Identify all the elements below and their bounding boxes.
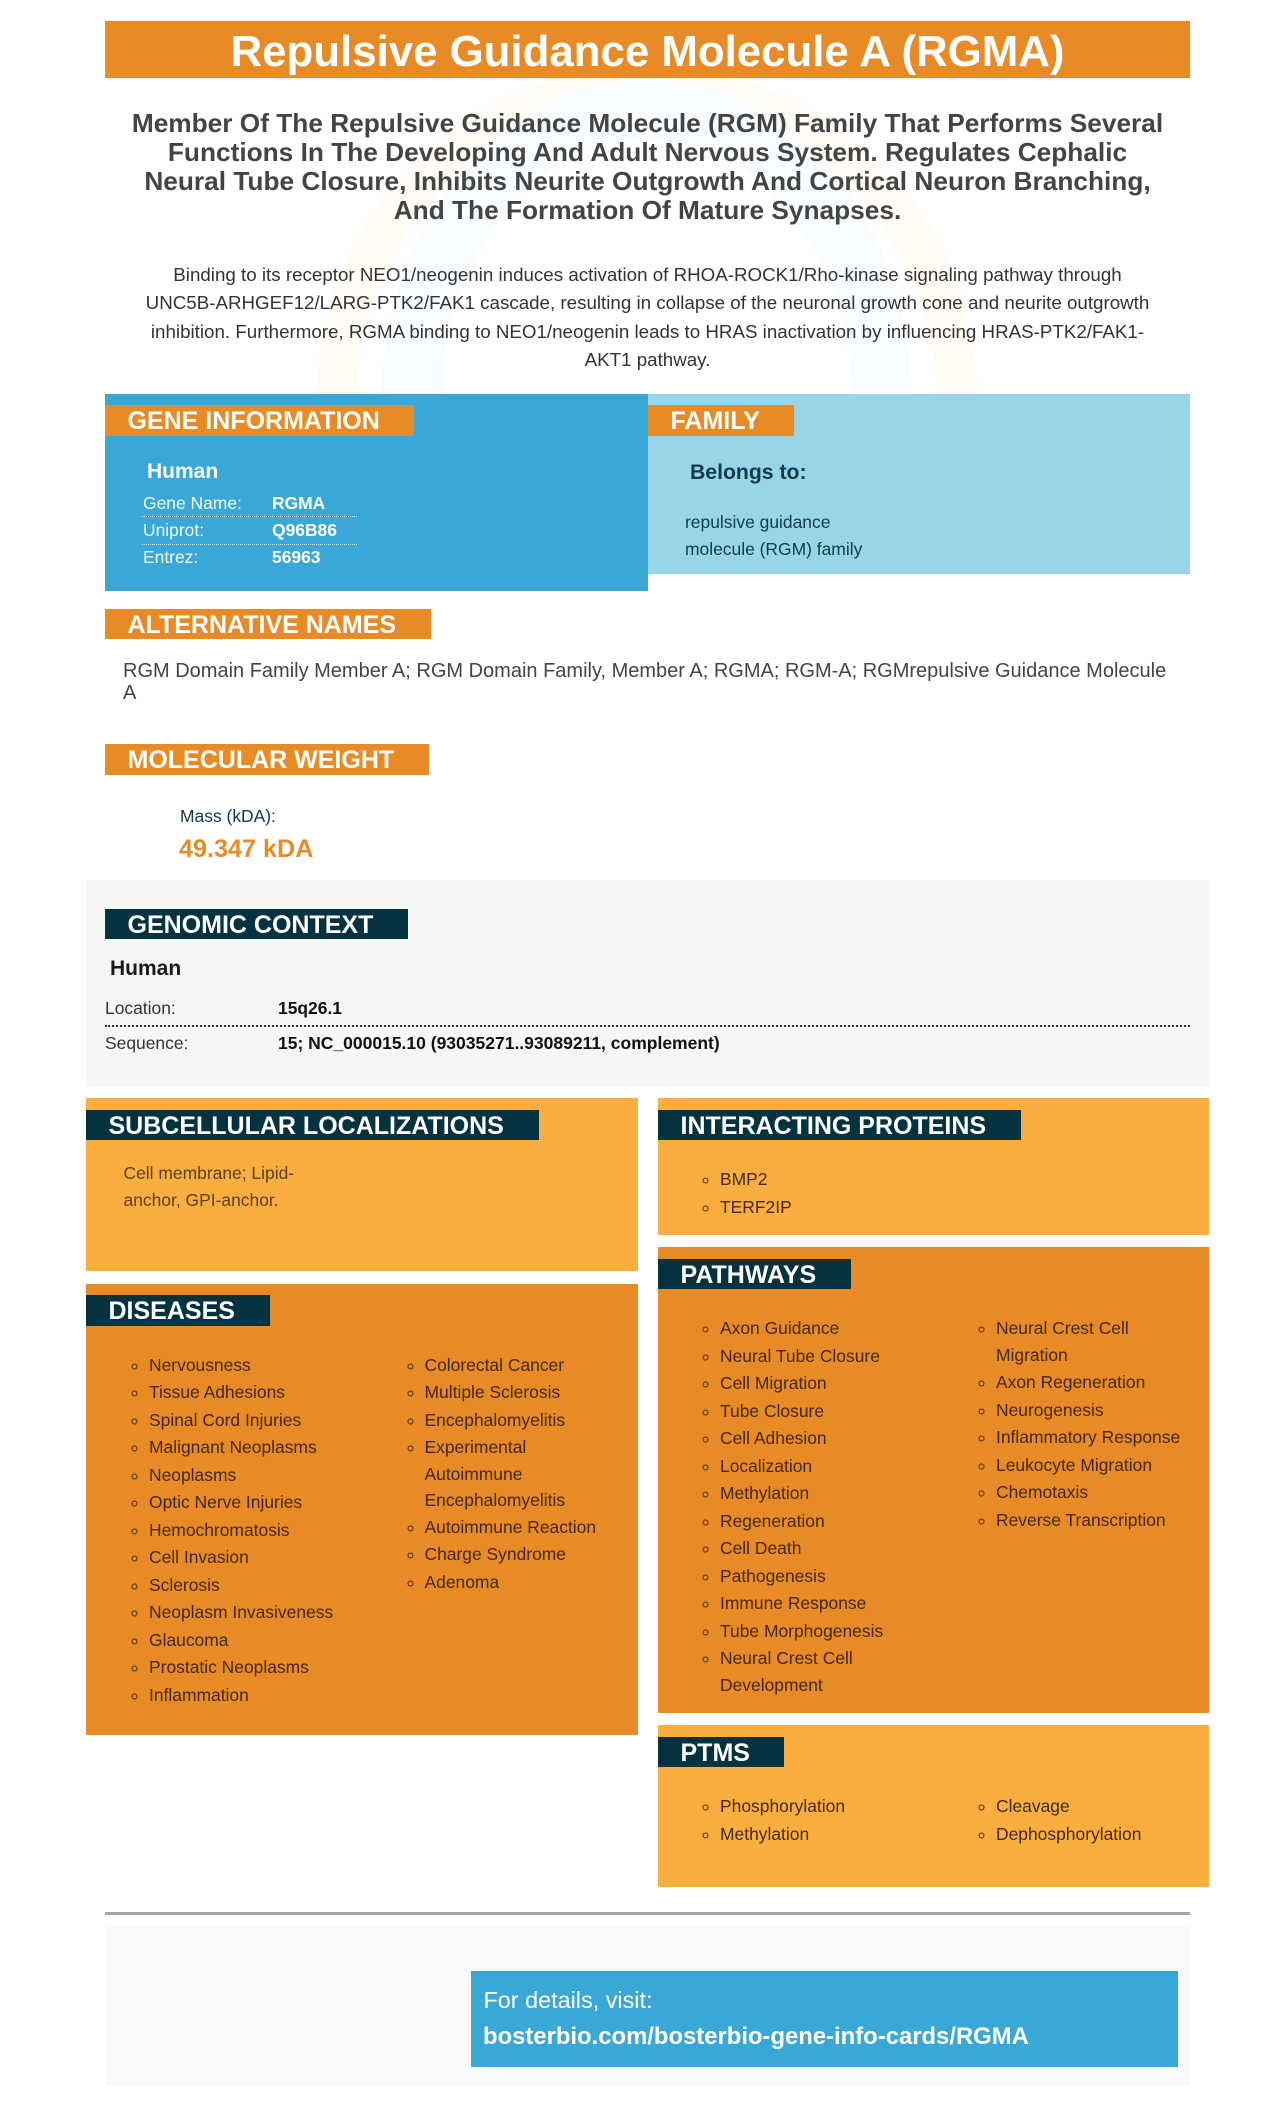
pathway list column 1: Localization <box>720 1456 812 1476</box>
background watermark logo <box>318 78 976 394</box>
protein list <box>702 1169 792 1217</box>
heading: pathways <box>658 1259 851 1289</box>
summary heading: Member Of The Repulsive Guidance Molecule (RGM) Family That Performs Several <box>132 108 1163 138</box>
disease list column 2: Autoimmune Reaction <box>424 1517 596 1537</box>
heading: genomic context: GENOMIC CONTEXT <box>128 911 373 939</box>
details url: bosterbio.com/bosterbio-gene-info-cards/RGMA <box>483 2023 1029 2050</box>
localization text: Cell membrane; Lipid- <box>124 1163 294 1183</box>
disease list column 2: Charge Syndrome <box>424 1544 566 1564</box>
details label: For details, visit: <box>484 1987 652 2013</box>
sequence row: 15; NC_000015.10 (93035271..93089211, complement) <box>278 1033 720 1053</box>
pathway list column 1: Pathogenesis <box>720 1566 826 1586</box>
ptm list column 2: Cleavage <box>996 1796 1070 1816</box>
heading: diseases <box>86 1295 270 1326</box>
panel: footer <box>105 1927 1190 2086</box>
panel: diseases <box>86 1284 638 1735</box>
description text: UNC5B-ARHGEF12/LARG-PTK2/FAK1 cascade, resulting in collapse of the neuronal growth cone and neurite outgrowth <box>146 292 1149 313</box>
ptm list column 1: Methylation <box>720 1824 809 1844</box>
disease list column 1: Neoplasm Invasiveness <box>149 1602 333 1622</box>
ptm list column 1 <box>702 1796 845 1844</box>
pathway list column 1: Cell Migration <box>720 1373 827 1393</box>
disease list column 1: Hemochromatosis <box>149 1520 290 1540</box>
pathway list column 1: Methylation <box>720 1483 809 1503</box>
panel: pathways <box>658 1247 1209 1713</box>
disease list column 1: Spinal Cord Injuries <box>149 1410 301 1430</box>
callout: details link <box>471 1971 1178 2067</box>
pathway list column 1: Cell Adhesion <box>720 1428 827 1448</box>
entrez row: 56963 <box>272 547 320 567</box>
protein list: BMP2 <box>720 1169 768 1189</box>
heading: interacting proteins: INTERACTING PROTEINS <box>680 1112 986 1140</box>
disease list column 1: Glaucoma <box>149 1630 228 1650</box>
heading: subcellular localizations: SUBCELLULAR LOCALIZATIONS <box>108 1112 504 1140</box>
disease list column 2: Experimental Autoimmune Encephalomyelitis <box>424 1437 565 1510</box>
belongs to label: Belongs to: <box>690 461 807 484</box>
disease list column 2 <box>408 1355 596 1592</box>
disease list column 2: Adenoma <box>424 1572 499 1592</box>
mass label: Mass (kDA): <box>180 806 276 826</box>
disease list column 1: Malignant Neoplasms <box>149 1437 317 1457</box>
alternative names text: A <box>123 682 136 704</box>
gene name row: Gene Name: <box>143 493 242 513</box>
heading: ptms <box>658 1737 784 1767</box>
panel: gene information <box>105 394 648 591</box>
pathway list column 1: Neural Crest Cell Development <box>720 1648 853 1695</box>
panel: genomic context <box>86 880 1209 1086</box>
pathway list column 2: Neural Crest Cell Migration <box>996 1318 1129 1365</box>
summary heading: And The Formation Of Mature Synapses. <box>394 195 901 225</box>
protein list: TERF2IP <box>720 1197 792 1217</box>
family text: molecule (RGM) family <box>685 539 862 559</box>
description text: Binding to its receptor NEO1/neogenin induces activation of RHOA-ROCK1/Rho-kinase signaling pathway through <box>173 264 1122 285</box>
pathway list column 2: Neurogenesis <box>996 1400 1104 1420</box>
species label: Human <box>147 460 218 483</box>
disease list column 2: Encephalomyelitis <box>424 1410 565 1430</box>
gene name row <box>142 490 357 517</box>
pathway list column 1 <box>702 1318 883 1695</box>
disease list column 1: Neoplasms <box>149 1465 236 1485</box>
localization text: anchor, GPI-anchor. <box>124 1190 279 1210</box>
summary heading: Functions In The Developing And Adult Nervous System. Regulates Cephalic <box>168 137 1127 167</box>
disease list column 2: Multiple Sclerosis <box>424 1382 560 1402</box>
pathway list column 2 <box>978 1318 1180 1530</box>
panel: ptms <box>658 1725 1209 1887</box>
panel: interacting proteins <box>658 1098 1209 1235</box>
summary heading <box>132 108 1163 225</box>
disease list column 1: Sclerosis <box>149 1575 220 1595</box>
alternative names text: RGM Domain Family Member A; RGM Domain Family, Member A; RGMA; RGM-A; RGMrepulsive Guidance Molecule <box>123 660 1166 682</box>
uniprot row <box>142 517 357 545</box>
disease list column 1: Prostatic Neoplasms <box>149 1657 309 1677</box>
heading: alternative names: ALTERNATIVE NAMES <box>128 611 396 639</box>
title banner: Repulsive Guidance Molecule A (RGMA) <box>231 27 1064 76</box>
pathway list column 1: Axon Guidance <box>720 1318 839 1338</box>
mass value: 49.347 kDA <box>179 835 313 863</box>
location row <box>105 995 1190 1027</box>
disease list column 1: Optic Nerve Injuries <box>149 1492 302 1512</box>
location row: Location: <box>105 998 176 1018</box>
pathway list column 1: Tube Morphogenesis <box>720 1621 883 1641</box>
pathway list column 2: Leukocyte Migration <box>996 1455 1152 1475</box>
family text: repulsive guidance <box>685 512 830 532</box>
heading: pathways: PATHWAYS <box>680 1261 816 1289</box>
pathway list column 1: Cell Death <box>720 1538 801 1558</box>
disease list column 1: Inflammation <box>149 1685 249 1705</box>
disease list column 2: Colorectal Cancer <box>424 1355 564 1375</box>
entrez row: Entrez: <box>143 547 198 567</box>
pathway list column 2: Reverse Transcription <box>996 1510 1166 1530</box>
pathway list column 2: Chemotaxis <box>996 1482 1088 1502</box>
species label: Human <box>110 957 181 980</box>
heading: molecular weight: MOLECULAR WEIGHT <box>128 746 394 774</box>
ptm list column 2 <box>978 1796 1141 1844</box>
pathway list column 1: Tube Closure <box>720 1401 824 1421</box>
heading: family: FAMILY <box>670 407 760 435</box>
disease list column 1: Nervousness <box>149 1355 251 1375</box>
pathway list column 1: Regeneration <box>720 1511 825 1531</box>
location row: 15q26.1 <box>278 998 342 1018</box>
heading: gene information: GENE INFORMATION <box>128 407 380 435</box>
pathway list column 2: Inflammatory Response <box>996 1427 1180 1447</box>
description text: AKT1 pathway. <box>585 349 710 370</box>
localization text <box>124 1163 294 1210</box>
description text <box>146 264 1149 370</box>
disease list column 1: Tissue Adhesions <box>149 1382 285 1402</box>
disease list column 1: Cell Invasion <box>149 1547 249 1567</box>
ptm list column 2: Dephosphorylation <box>996 1824 1141 1844</box>
uniprot row: Q96B86 <box>272 520 337 540</box>
alternative names text <box>123 660 1166 704</box>
panel: subcellular localizations <box>86 1098 638 1271</box>
pathway list column 1: Immune Response <box>720 1593 866 1613</box>
heading: ptms: PTMS <box>680 1739 750 1767</box>
uniprot row: Uniprot: <box>143 520 204 540</box>
pathway list column 2: Axon Regeneration <box>996 1372 1145 1392</box>
gene name row: RGMA <box>272 493 325 513</box>
title banner <box>105 21 1190 78</box>
heading: diseases: DISEASES <box>108 1297 235 1325</box>
panel: family <box>648 394 1190 574</box>
summary heading: Neural Tube Closure, Inhibits Neurite Outgrowth And Cortical Neuron Branching, <box>144 166 1151 196</box>
heading: family <box>648 405 794 436</box>
description text: inhibition. Furthermore, RGMA binding to NEO1/neogenin leads to HRAS inactivation by influencing HRAS-PTK2/FAK1- <box>151 321 1144 342</box>
sequence row: Sequence: <box>105 1033 188 1053</box>
disease list column 1 <box>132 1355 333 1705</box>
entrez row <box>143 547 320 567</box>
ptm list column 1: Phosphorylation <box>720 1796 845 1816</box>
pathway list column 1: Neural Tube Closure <box>720 1346 880 1366</box>
family text <box>685 512 862 559</box>
